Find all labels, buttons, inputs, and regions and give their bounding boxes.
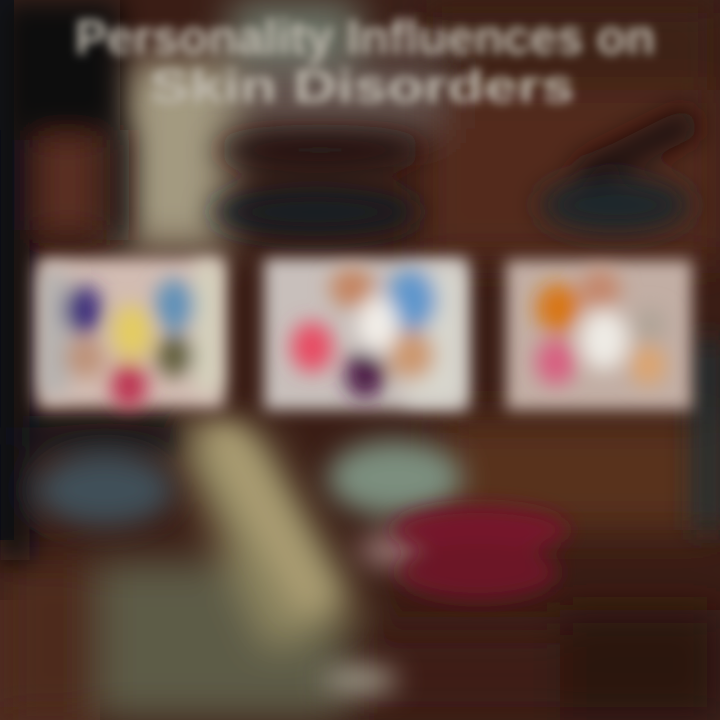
title	[75, 11, 655, 112]
icon: white circle	[580, 310, 628, 370]
icon: pink circle	[536, 339, 576, 385]
icon: red circle	[111, 363, 147, 409]
icon: grey circle	[633, 308, 667, 342]
icon: white circle	[358, 297, 398, 353]
title line 2: Skin Disorders	[150, 60, 574, 112]
panel: right card	[506, 260, 692, 410]
icon: orange circle	[536, 283, 580, 333]
title line 1: Personality Influences on	[75, 11, 655, 65]
icon: peach circle	[630, 345, 666, 385]
panel: left card	[38, 258, 224, 409]
icon: maroon circle	[345, 351, 385, 399]
icon: pink circle	[291, 322, 333, 372]
icon: purple circle	[64, 285, 102, 335]
panel: middle card	[264, 258, 468, 410]
icon: olive circle	[156, 335, 194, 377]
icon: tan circle	[65, 338, 105, 378]
icon: salmon circle	[580, 269, 620, 311]
icon: blue circle	[387, 269, 437, 331]
icon: orange circle	[330, 268, 374, 308]
icon: peach circle	[389, 330, 435, 380]
icon: yellow circle	[112, 305, 152, 359]
icon: blue circle	[155, 279, 195, 331]
